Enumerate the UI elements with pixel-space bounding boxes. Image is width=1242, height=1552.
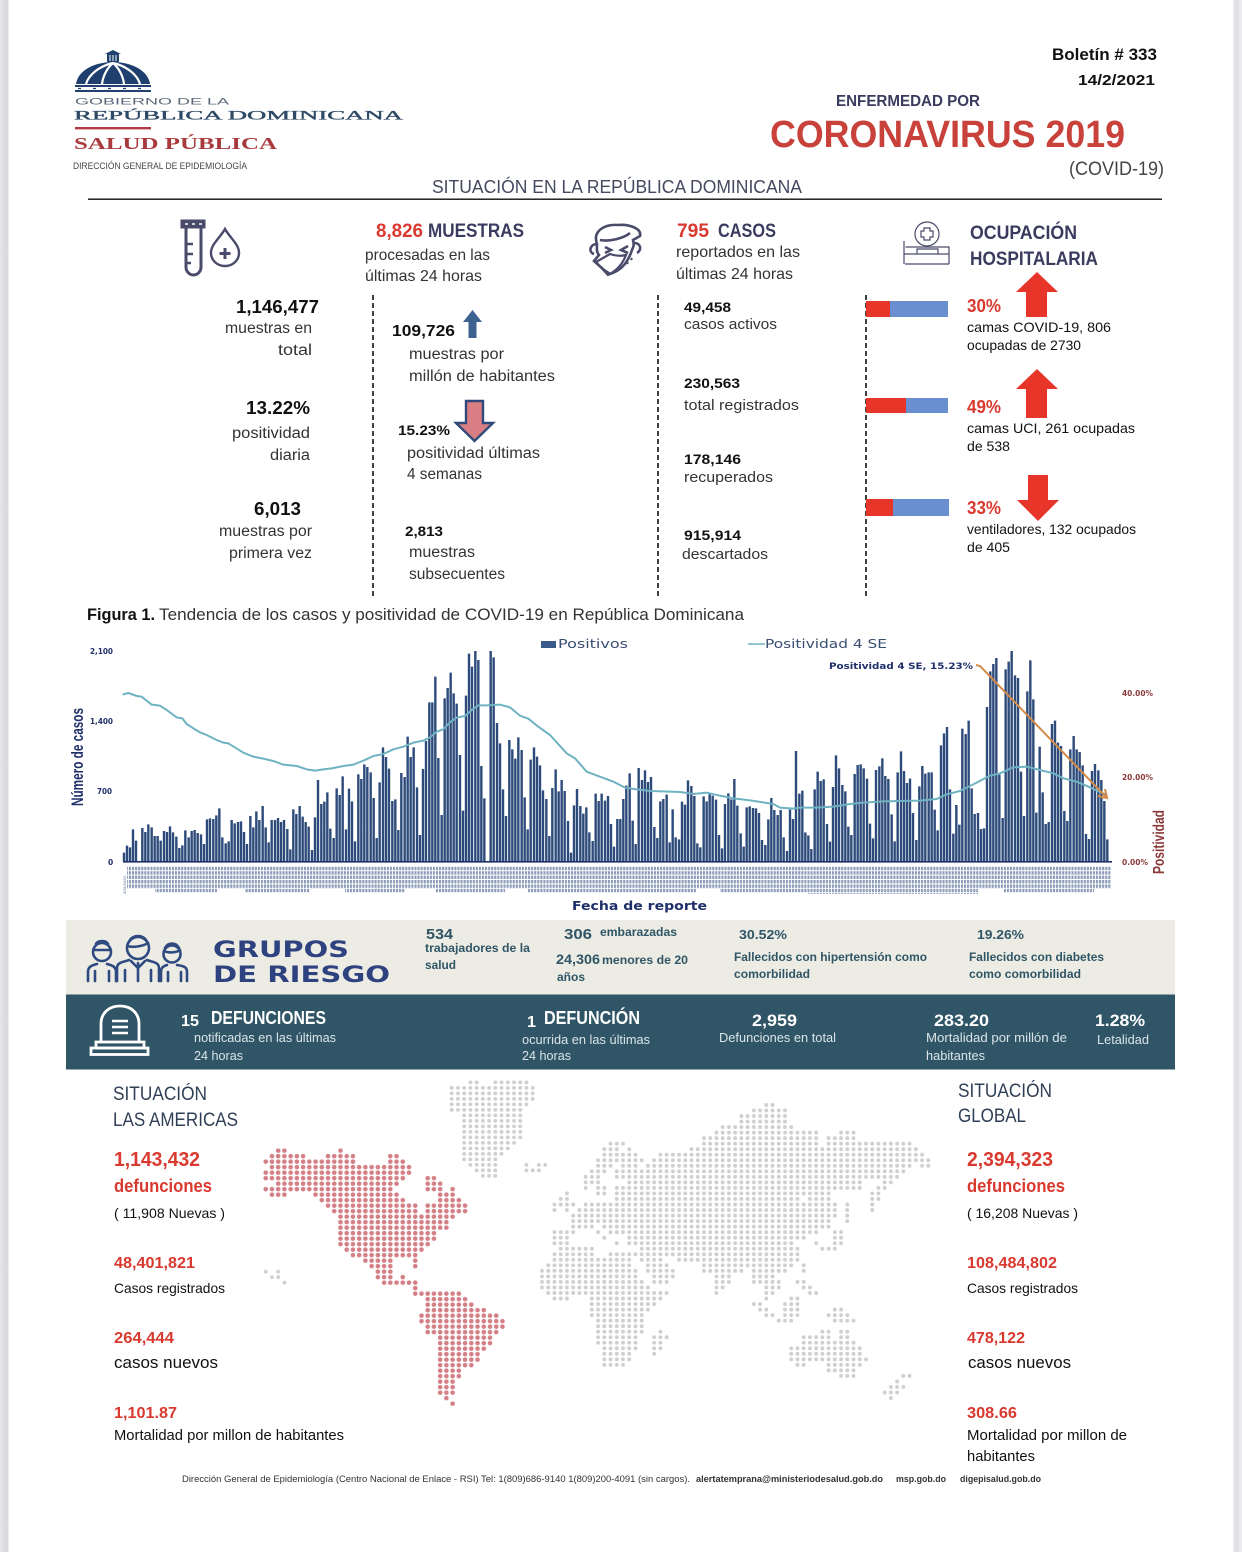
stat: total deaths: 2,959 [752,1011,797,1030]
stat: covid beds [967,296,1111,353]
text: samples description: procesadas en las [365,247,490,264]
right axis labels [1122,689,1168,874]
panel: hospital occupancy heading [904,222,1098,270]
footer: msp.gob.do [896,1474,946,1484]
panel: risk groups [66,920,1175,994]
logo text: DIRECCIÓN GENERAL DE EPIDEMIOLOGÍA [73,161,248,172]
stat: Americas deaths: 1,143,432 [114,1149,200,1171]
panel: situation in the Americas [113,1082,344,1444]
header: bulletin number and date: 14/2/2021 [1078,72,1155,89]
stat: covid beds: 30% [967,296,1001,316]
icon: sick face with mask [590,225,640,275]
left axis labels: 700 [97,787,112,796]
stat: discarded: 915,914 [684,527,741,543]
stat: total samples [225,297,319,359]
stat: ICU beds: de 538 [967,438,1010,454]
arrow: down pink [456,401,493,441]
stat: global new cases: 478,122 [967,1330,1025,1347]
stat: total samples: 1,146,477 [236,297,319,317]
text: cases description [676,244,800,283]
stat: ventilators: 33% [967,498,1001,518]
stat: mortality per million [926,1011,1067,1063]
column: sample rates [392,310,555,583]
figure caption: Figura 1. [87,605,155,624]
stat: ventilators [967,498,1136,555]
stat: hypertension: Fallecidos con hipertensión como [734,950,927,964]
logo text: REPÚBLICA DOMINICANA [74,108,404,122]
title [770,93,1164,180]
stat: ICU beds: camas UCI, 261 ocupadas [967,420,1135,436]
stat: global deaths [967,1149,1078,1221]
logo text: SALUD PÚBLICA [74,134,277,153]
stat: death occurred: 24 horas [522,1048,571,1063]
arrow: up red [1016,272,1058,317]
left axis labels: 1,400 [90,717,113,726]
stat: under 20: años [557,970,585,984]
stat: health workers: trabajadores de la [425,941,530,955]
stat: daily positivity: 13.22% [246,398,310,418]
world dot map [263,1080,931,1406]
stat: Americas mortality: 1,101.87 [114,1405,177,1422]
title: (COVID-19) [1069,159,1164,180]
arrow: up blue [463,310,482,338]
left axis labels [69,647,113,867]
stat: 4-week positivity: 15.23% [398,422,451,438]
footer: digepisalud.gob.do [960,1474,1041,1484]
icon: test tube and blood drop [182,221,239,275]
map: Eurasia, Africa and Oceania grey dots [539,1102,931,1401]
stat: hypertension: comorbilidad [734,967,810,981]
stat: under 20: 24,306 [556,951,600,967]
text: cases description: reportados en las [676,244,800,261]
left axis labels: 2,100 [90,647,113,656]
stat: global deaths: 2,394,323 [967,1149,1053,1171]
stat: death occurred: 1 [527,1014,536,1031]
panel: samples summary [182,221,524,285]
heading: risk groups: GRUPOS [213,938,349,963]
stat: lethality: Letalidad [1097,1032,1149,1047]
map: Greenland and Iceland grey dots [449,1080,548,1179]
stat: pregnant: embarazadas [600,925,677,939]
bars: daily positives [124,651,1107,862]
stat: samples per million: 109,726 [392,323,455,340]
stat: recovered [684,451,773,486]
legend: Positivos [558,636,628,651]
stat: discarded [682,527,768,563]
stat: Americas new cases: 264,444 [114,1330,174,1347]
heading: global [958,1079,1052,1127]
x axis date ticks: 3/31/2020 [122,875,127,894]
right axis labels: Positividad [1151,810,1168,874]
stat: active cases: 49,458 [684,299,731,315]
stat: daily positivity: diaria [270,447,310,464]
stat: daily positivity [232,398,310,464]
heading: samples: 8,826 [376,221,423,242]
subtitle: SITUACIÓN EN LA REPÚBLICA DOMINICANA [432,176,802,197]
stat: Americas deaths [114,1149,225,1221]
bar: ICU beds 49% [866,398,948,413]
stat: diabetes: como comorbilidad [969,967,1081,981]
stat: total deaths [719,1011,836,1045]
right axis labels: 20.00% [1122,773,1153,782]
stat: deaths notified: 24 horas [194,1048,243,1063]
text: samples description [365,247,490,285]
left axis labels: Número de casos [69,708,87,806]
logo text [73,96,404,172]
stat: subsequent samples [405,523,505,583]
stat: 4-week positivity [398,422,540,483]
header: bulletin number and date: Boletín # 333 [1052,46,1157,64]
stat: mortality per million: Mortalidad por millón de [926,1030,1067,1045]
stat: pregnant [564,925,677,943]
stat: Americas deaths: ( 11,908 Nuevas ) [114,1205,225,1221]
icon: gravestone [91,1006,148,1054]
icon: hospital bed [904,222,949,264]
title: CORONAVIRUS 2019 [770,114,1125,156]
header: bulletin number and date [1052,46,1157,89]
stat: global mortality [967,1405,1127,1465]
stat: lethality [1095,1011,1149,1047]
stat: global deaths: ( 16,208 Nuevas ) [967,1205,1078,1221]
stat: health workers: 534 [426,926,454,943]
stat: discarded: descartados [682,546,768,563]
stat: pregnant: 306 [564,926,592,943]
stat: under 20: menores de 20 [602,953,688,967]
chart: cases and positivity [69,636,1168,913]
logo text: GOBIERNO DE LA [75,96,230,108]
legend: Positividad 4 SE [765,636,887,651]
stat: total registered: total registrados [684,397,799,414]
text: samples description: últimas 24 horas [365,268,482,285]
heading: global: SITUACIÓN [958,1079,1052,1102]
stat: deaths notified [181,1008,336,1063]
stat: death occurred: DEFUNCIÓN [544,1007,640,1028]
footer: alertatemprana@ministeriodesalud.gob.do [696,1474,884,1484]
stat: global cases: 108,484,802 [967,1255,1057,1272]
stat: global new cases [967,1330,1071,1372]
stat: total samples: muestras en [225,320,312,337]
stat: global deaths: defunciones [967,1175,1065,1196]
map: Americas red dots [263,1148,506,1406]
stat: samples per million: muestras por [409,346,504,363]
panel: global situation [958,1079,1127,1465]
x axis date ticks [122,866,1111,894]
footer [182,1474,1041,1484]
stat: mortality per million: habitantes [926,1048,985,1063]
stat: first-time samples [219,499,312,562]
stat: lethality: 1.28% [1095,1011,1145,1030]
annotation: positivity 4 SE [829,662,1107,798]
stat: global mortality: Mortalidad por millon de [967,1428,1127,1444]
right axis labels: 40.00% [1122,689,1153,698]
stat: global mortality: 308.66 [967,1405,1017,1422]
stat: deaths notified: notificadas en las últimas [194,1030,336,1045]
stat: daily positivity: positividad [232,425,310,442]
stat: covid beds: camas COVID-19, 806 [967,319,1111,335]
stat: recovered: recuperados [684,469,773,486]
stat: ICU beds: 49% [967,397,1001,417]
stat: Americas mortality: Mortalidad por millon de habitantes [114,1428,344,1444]
heading: cases: CASOS [718,221,776,242]
arrow: up red [1016,369,1058,418]
stat: health workers: salud [425,958,456,972]
stat: Americas cases: Casos registrados [114,1280,225,1296]
stat: global new cases: casos nuevos [968,1354,1071,1372]
stat: active cases [684,299,777,333]
heading: cases: 795 [677,221,709,242]
stat: total registered: 230,563 [684,375,740,391]
stat: global cases [967,1255,1078,1296]
stat: mortality per million: 283.20 [934,1011,989,1030]
map: Hawaii grey dots [263,1269,288,1285]
stat: first-time samples: muestras por [219,523,312,540]
stat: death occurred: ocurrida en las últimas [522,1032,650,1047]
stat: hypertension [734,927,927,981]
stat: hypertension: 30.52% [739,927,787,942]
heading: occupancy: HOSPITALARIA [970,249,1098,270]
stat: Americas cases [114,1255,225,1296]
stat: health workers [425,926,530,972]
heading: Americas [113,1082,238,1131]
stat: total samples: total [278,342,312,359]
bar: covid beds 30% [866,301,948,317]
stat: Americas deaths: defunciones [114,1175,212,1196]
stat: samples per million: millón de habitantes [409,368,555,385]
stat: Americas new cases: casos nuevos [114,1354,218,1372]
stat: diabetes: Fallecidos con diabetes [969,950,1104,964]
icon: three people [88,936,187,981]
stat: deaths notified: 15 [181,1013,199,1030]
heading: risk groups [213,938,390,988]
footer: Dirección General de Epidemiología (Centro Nacional de Enlace - RSI) Tel: 1(809)686-9140 1(809)200-4091 (sin cargos). [182,1474,690,1484]
stat: Americas new cases [114,1330,218,1372]
stat: total deaths: Defunciones en total [719,1030,836,1045]
stat: first-time samples: primera vez [229,545,312,562]
stat: active cases: casos activos [684,316,777,333]
heading: occupancy: OCUPACIÓN [970,222,1077,244]
heading: cases [677,221,776,242]
stat: Americas cases: 48,401,821 [114,1255,195,1272]
heading: samples [376,221,524,242]
arrow: down red [1017,475,1059,521]
title: ENFERMEDAD POR [836,93,980,110]
stat: global cases: Casos registrados [967,1280,1078,1296]
text: cases description: últimas 24 horas [676,266,793,283]
line: positivity 4 SE [123,693,1107,809]
stat: 4-week positivity: positividad últimas [407,445,540,462]
stat: subsequent samples: muestras [409,544,475,561]
stat: total registered [684,375,799,414]
annotation: positivity 4 SE: Positividad 4 SE, 15.23% [829,662,974,672]
stat: first-time samples: 6,013 [254,499,301,519]
heading: samples: MUESTRAS [428,221,524,242]
column: case totals [682,299,799,563]
heading: Americas: LAS AMERICAS [113,1109,238,1131]
heading: global: GLOBAL [958,1105,1026,1127]
panel: deaths [66,994,1175,1070]
column: sample totals [219,297,319,562]
x axis title: Fecha de reporte [572,898,707,913]
icon: dome [75,50,151,92]
stat: deaths notified: DEFUNCIONES [211,1008,326,1028]
stat: global mortality: habitantes [967,1449,1035,1465]
stat: subsequent samples: subsecuentes [409,566,505,583]
right axis labels: 0.00% [1122,858,1148,867]
stat: covid beds: ocupadas de 2730 [967,337,1081,353]
stat: subsequent samples: 2,813 [405,523,443,539]
heading: Americas: SITUACIÓN [113,1082,207,1105]
column: hospital occupancy [866,272,1136,555]
left axis labels: 0 [108,858,113,867]
stat: diabetes [969,927,1104,981]
stat: death occurred [522,1007,650,1063]
stat: Americas mortality [114,1405,344,1444]
stat: ventilators: de 405 [967,539,1010,555]
figure caption: Tendencia de los casos y positividad de COVID-19 en República Dominicana [159,605,745,624]
stat: diabetes: 19.26% [977,927,1024,942]
legend [541,636,887,651]
stat: under 20 [556,951,688,984]
stat: 4-week positivity: 4 semanas [407,466,482,483]
bar: ventilators 33% [866,499,949,516]
heading: occupancy [970,222,1098,270]
stat: ventilators: ventiladores, 132 ocupados [967,521,1136,537]
stat: ICU beds [967,397,1135,454]
header: logo [73,50,404,172]
stat: samples per million [392,323,555,385]
panel: cases summary [590,221,800,283]
heading: risk groups: DE RIESGO [213,963,390,988]
stat: recovered: 178,146 [684,451,741,467]
